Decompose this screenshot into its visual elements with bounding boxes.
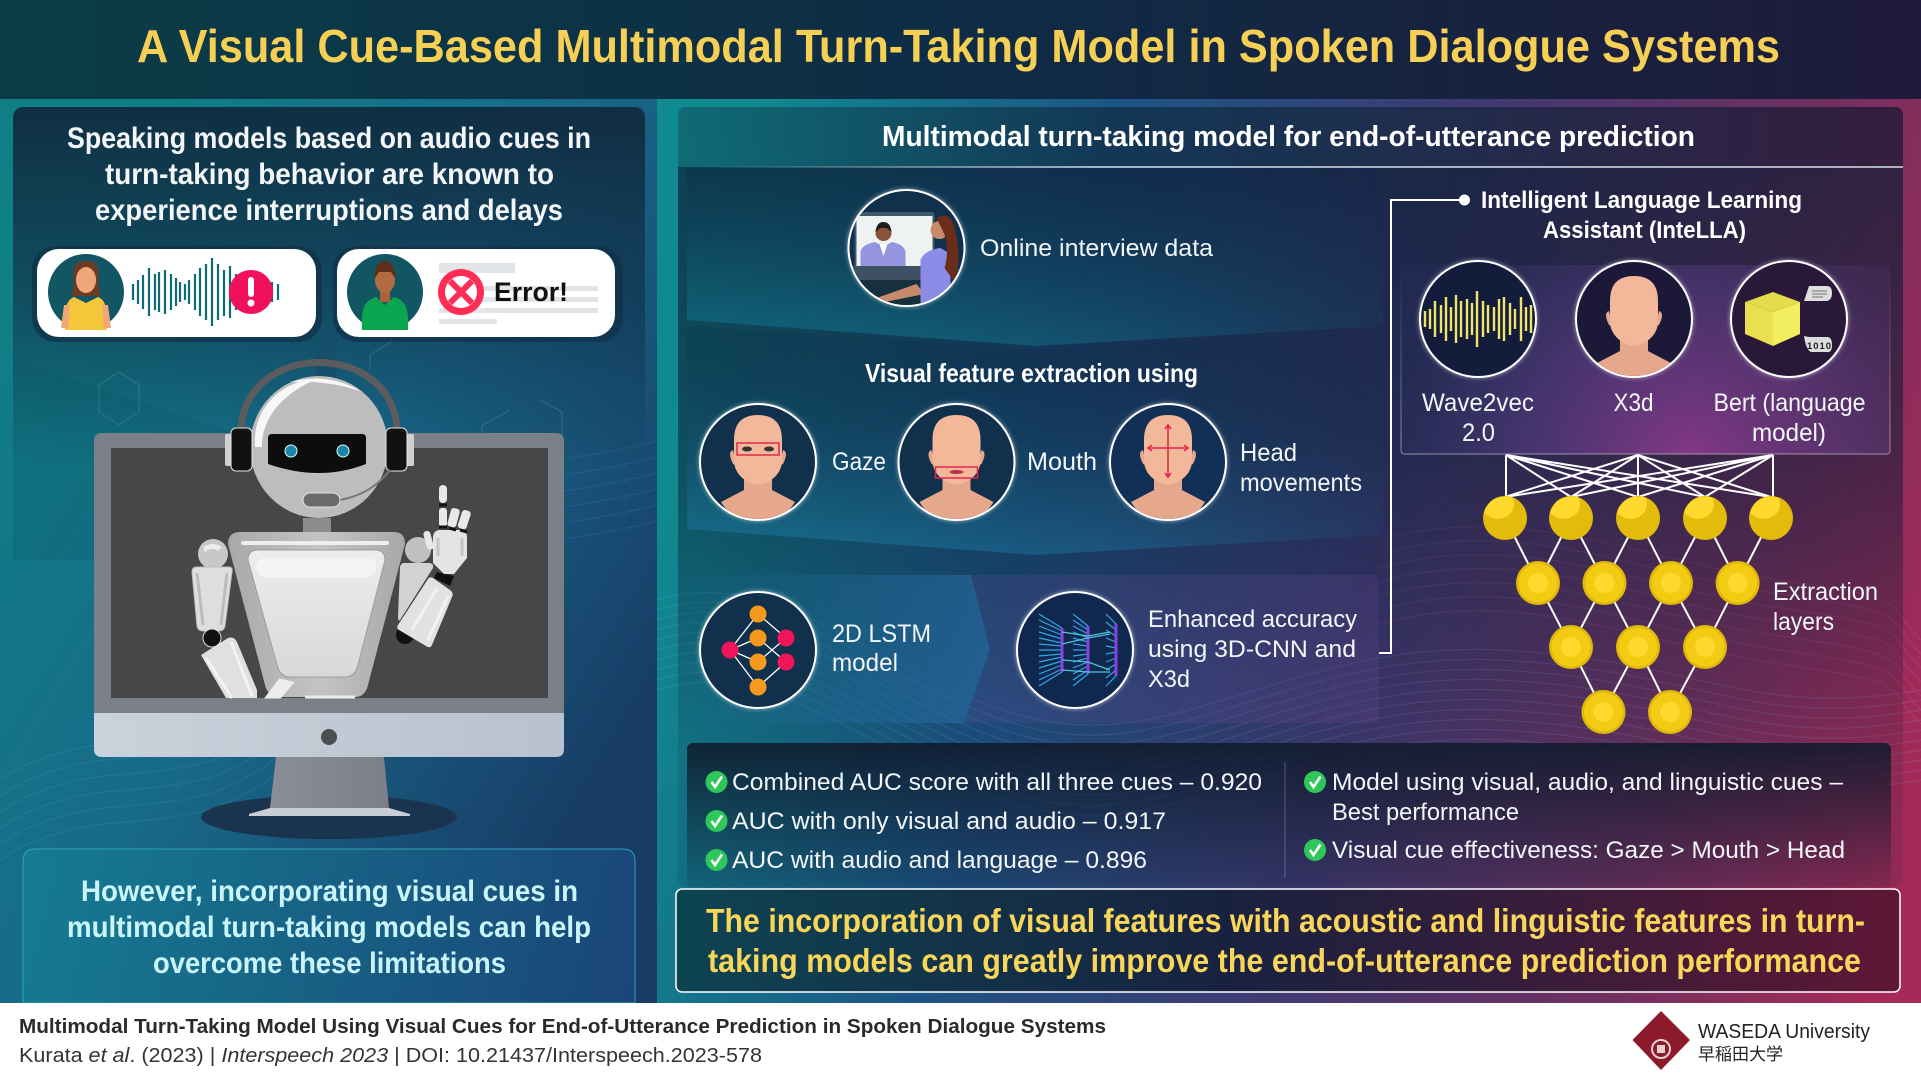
left hand on chin edge xyxy=(267,680,355,697)
left arm xyxy=(192,539,257,698)
label: Mouth xyxy=(1027,448,1097,476)
heading: InteLLA: Intelligent Language Learning xyxy=(1481,187,1802,214)
background: left side xyxy=(0,0,657,1005)
heading: audio cue limitations: turn-taking behavior are known to xyxy=(105,158,554,191)
visor xyxy=(268,434,366,473)
result: visual and audio: AUC with only visual and audio – 0.917 xyxy=(732,808,1166,835)
label: Extraction xyxy=(1773,578,1878,606)
background: right side xyxy=(657,0,1921,1005)
module: Bert: model) xyxy=(1752,419,1826,447)
logo: Waseda University: 早稲田大学 xyxy=(1698,1045,1783,1064)
interview item xyxy=(848,190,1214,306)
panel: 3D-CNN: X3d xyxy=(1148,666,1190,693)
citation title: Multimodal Turn-Taking Model Using Visual Cues for End-of-Utterance Prediction in Spoken Dialogue Systems xyxy=(19,1016,1106,1038)
icon: face with eyes box xyxy=(700,404,816,522)
right arm xyxy=(396,485,472,647)
item: gaze xyxy=(700,404,886,522)
icon: face with axis arrows xyxy=(1110,404,1226,522)
icon: waveform xyxy=(1425,291,1531,347)
label: Head xyxy=(1240,439,1297,467)
result: cue effectiveness: Visual cue effectiveness: Gaze > Mouth > Head xyxy=(1332,837,1845,864)
card: woman audio interruption xyxy=(32,246,322,342)
heading: InteLLA: Assistant (InteLLA) xyxy=(1543,217,1746,244)
icon: alert xyxy=(229,270,273,314)
hexagon decorations xyxy=(13,340,562,560)
callout: visual cues solution: However, incorporating visual cues in xyxy=(81,875,578,908)
item: mouth xyxy=(898,404,1097,522)
panel: InteLLA modules xyxy=(1401,261,1890,454)
ear cups xyxy=(225,428,414,471)
icon: man avatar xyxy=(347,254,423,330)
label: X3d xyxy=(1614,389,1654,417)
icon: head xyxy=(1576,261,1692,383)
panel: multimodal model xyxy=(678,107,1903,888)
icon: language cube: 1010 xyxy=(1807,341,1831,352)
label: Enhanced accuracy xyxy=(1148,606,1357,633)
icon: computer monitor with robot xyxy=(94,362,564,839)
label: Gaze xyxy=(832,448,886,476)
icon: audio waveform xyxy=(133,258,278,326)
monitor stand xyxy=(201,757,457,839)
citation details: Kurata et al. (2023) | Interspeech 2023 | DOI: 10.21437/Interspeech.2023-578 xyxy=(19,1045,762,1067)
panel: left problem statement xyxy=(13,107,645,1003)
module: Bert xyxy=(1714,261,1866,447)
result: best performance: Model using visual, audio, and linguistic cues – xyxy=(1332,769,1844,796)
subheading: visual features: Visual feature extraction using xyxy=(865,358,1198,388)
chart: neural network extraction layers: layers xyxy=(1773,608,1834,636)
panel: 2D LSTM xyxy=(687,575,990,723)
module: Wave2vec: 2.0 xyxy=(1462,419,1495,447)
label: 2D LSTM xyxy=(832,620,931,648)
band: data section xyxy=(687,168,1383,346)
heading: audio cue limitations: Speaking models based on audio cues in xyxy=(67,122,591,155)
module: Wave2vec xyxy=(1420,261,1536,447)
icon: language cube xyxy=(1731,261,1847,377)
connector behind robot xyxy=(316,337,336,397)
arrow: connector to InteLLA xyxy=(1379,194,1470,653)
microphone xyxy=(303,470,390,507)
panel: 3D-CNN xyxy=(964,575,1379,723)
label: Online interview data xyxy=(980,235,1214,262)
result: best performance xyxy=(1304,769,1844,826)
head xyxy=(250,376,388,518)
panel: results xyxy=(687,743,1891,888)
card: man error xyxy=(333,246,623,342)
logo: Waseda University xyxy=(1632,1011,1870,1070)
callout: visual cues solution: overcome these limitations xyxy=(153,947,506,980)
icon: woman avatar xyxy=(48,254,124,330)
icon: neural network xyxy=(700,592,816,708)
callout: visual cues solution: multimodal turn-taking models can help xyxy=(67,911,591,944)
callout: visual cues solution xyxy=(23,849,635,1003)
divider xyxy=(1284,762,1286,878)
panel: 2D LSTM: model xyxy=(832,649,898,677)
logo: Waseda University: WASEDA University xyxy=(1698,1021,1870,1043)
error label: Error! xyxy=(494,277,568,307)
heading: audio cue limitations: experience interruptions and delays xyxy=(95,194,563,227)
heading: InteLLA xyxy=(1481,187,1802,244)
icon: 3D-CNN xyxy=(1017,592,1133,708)
title: A Visual Cue-Based Multimodal Turn-Taking Model in Spoken Dialogue Systems xyxy=(137,20,1780,72)
label: Bert (language xyxy=(1714,389,1866,417)
gray text lines xyxy=(439,263,598,324)
footer xyxy=(0,1003,1921,1081)
result: combined: Combined AUC score with all three cues – 0.920 xyxy=(732,769,1262,796)
band: features section xyxy=(687,440,1374,555)
headphones band xyxy=(241,362,397,430)
chart: neural network extraction layers xyxy=(1483,455,1878,734)
panel header xyxy=(678,107,1903,168)
background wave lines xyxy=(0,440,1921,860)
result: best performance: Best performance xyxy=(1332,799,1519,826)
neck xyxy=(303,518,331,533)
icon: error cross xyxy=(438,269,484,315)
header banner xyxy=(0,0,1921,99)
callout: conclusion: taking models can greatly improve the end-of-utterance prediction performance xyxy=(708,942,1861,979)
callout: conclusion xyxy=(676,889,1900,992)
heading: audio cue limitations xyxy=(67,122,591,227)
label: Wave2vec xyxy=(1422,389,1534,417)
item: head movements xyxy=(1110,404,1362,522)
icon: face with mouth box xyxy=(898,404,1014,522)
module: X3d xyxy=(1576,261,1692,417)
icon: online interview xyxy=(848,190,964,306)
torso xyxy=(228,532,405,697)
monitor frame xyxy=(94,433,564,713)
result: audio and language: AUC with audio and language – 0.896 xyxy=(732,847,1147,874)
panel header: Multimodal turn-taking model for end-of-utterance prediction xyxy=(882,121,1695,153)
item: head movements: movements xyxy=(1240,469,1362,497)
panel: 3D-CNN: using 3D-CNN and xyxy=(1148,636,1356,663)
robot xyxy=(192,362,472,698)
